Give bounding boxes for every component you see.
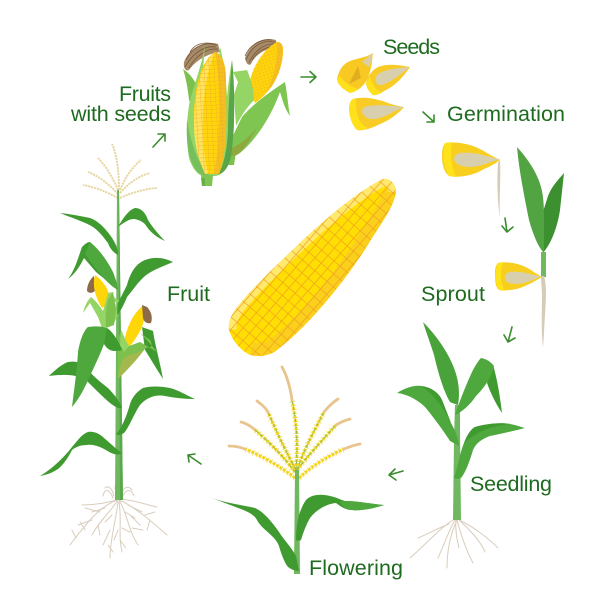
label: Fruits with seeds: with seeds [70, 102, 171, 126]
label: Sprout: Sprout [421, 282, 485, 306]
seed top [337, 53, 373, 93]
right husk [226, 70, 290, 165]
left silk [184, 43, 220, 71]
arrow: seedling to flowering [389, 469, 403, 480]
seeds group [337, 53, 410, 130]
seedling leaves [397, 322, 525, 479]
sprout root [541, 276, 546, 347]
seed bottom [349, 98, 404, 130]
flowering leaves [209, 495, 384, 571]
arrow: cob to seeds [301, 72, 316, 82]
label: Germination: Germination [447, 102, 565, 126]
fruit: full grown plant [40, 144, 195, 558]
plant stem [115, 190, 123, 500]
big corn cob [228, 178, 396, 356]
arrow: fruit to cobs [153, 134, 165, 147]
plant roots [70, 486, 167, 558]
fruits with seeds corn cobs [183, 39, 290, 186]
behind-leaf and right ear husk [118, 305, 163, 379]
corn life cycle infographic [40, 38, 564, 580]
seedling roots [410, 520, 498, 568]
left cob [194, 52, 226, 174]
seed right [366, 65, 410, 95]
plant tassel [83, 144, 157, 198]
sprout plant [495, 147, 564, 347]
label: Fruits with seeds [70, 82, 171, 126]
sprout seed [495, 262, 542, 291]
sprout leaves [517, 147, 564, 253]
right cob [250, 42, 283, 103]
label: Seedling: Seedling [470, 472, 552, 496]
germination: seed with root [442, 142, 500, 218]
flowering stem [294, 470, 300, 574]
arrow: seeds to germination [423, 112, 434, 122]
arrow: sprout to seedling [504, 327, 515, 342]
lower leaves [40, 326, 195, 476]
flowering tassel [229, 367, 360, 478]
arrow: germination to sprout [502, 218, 513, 232]
label: Fruits with seeds: Fruits [119, 82, 171, 106]
right cob silk [245, 39, 277, 65]
label: Fruit: Fruit [167, 282, 210, 306]
left husk [183, 44, 234, 186]
arrow: flowering to fruit [188, 454, 201, 464]
label: Flowering: Flowering [309, 556, 403, 580]
left ear [83, 275, 125, 328]
upper leaves [60, 208, 173, 315]
flowering plant [209, 367, 384, 574]
seedling stem [453, 405, 461, 520]
label: Seeds: Seeds [383, 35, 440, 59]
sprout stem [541, 252, 546, 277]
seedling plant [397, 322, 525, 568]
